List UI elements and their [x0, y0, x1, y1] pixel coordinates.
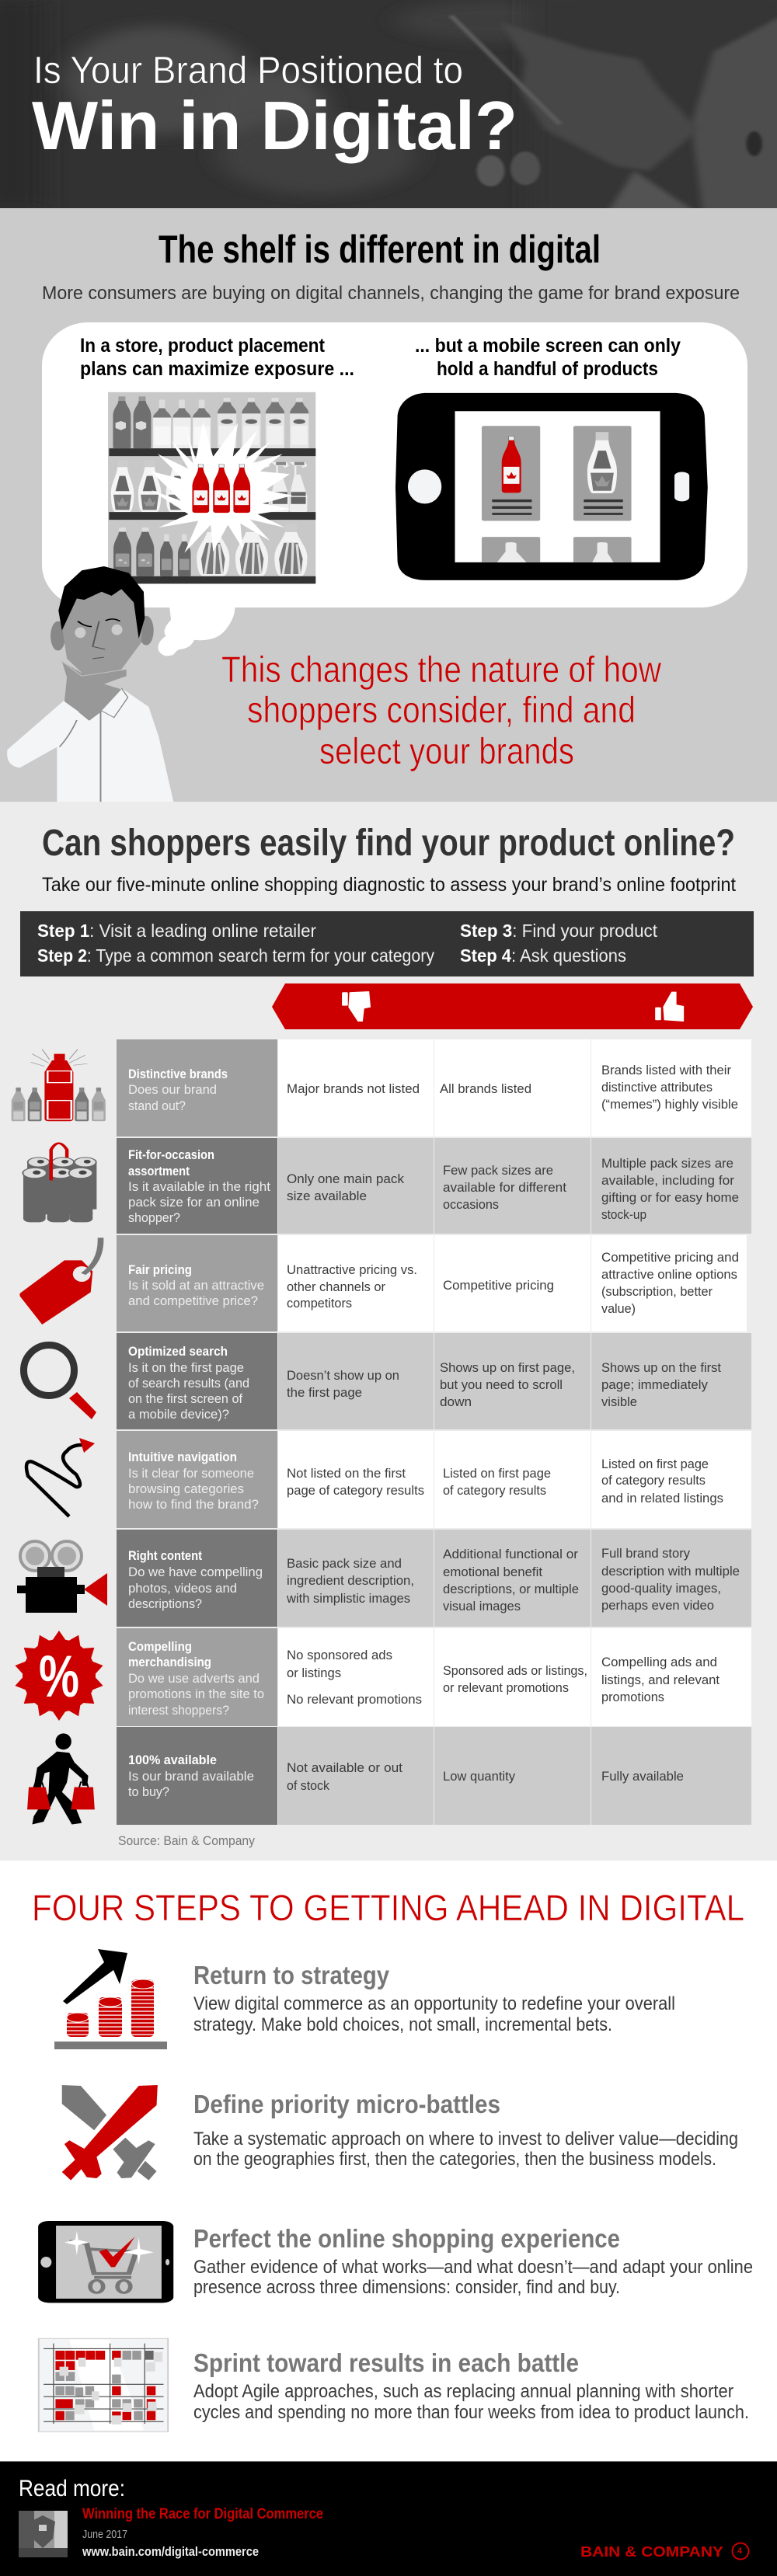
cells: Only one main pack	[287, 1171, 404, 1186]
row label: pack size for an online	[128, 1195, 260, 1210]
row label: Is it on the first page	[128, 1360, 244, 1375]
report date: June 2017	[82, 2528, 127, 2541]
cells: Not listed on the first	[287, 1466, 406, 1481]
icon: thumbs up	[655, 992, 684, 1022]
row label: Is it clear for someone	[128, 1466, 254, 1481]
row label: Is our brand available	[128, 1769, 254, 1784]
icon: multipack	[23, 1144, 96, 1222]
step body	[193, 1993, 675, 2035]
cells: Not available or out	[287, 1760, 402, 1775]
row label: a mobile device)?	[128, 1407, 229, 1422]
row label: Distinctive brands	[128, 1067, 228, 1081]
mobile caption: hold a handful of products	[437, 358, 658, 380]
icon: price tag	[20, 1238, 101, 1325]
cells: Listed on first page	[601, 1457, 709, 1471]
cells: Brands listed with their	[601, 1063, 731, 1077]
icon: chip stacks and arrow	[54, 1949, 167, 2049]
row label: stand out?	[128, 1098, 186, 1113]
step body: on the geographies first, then the categories, then the business models.	[193, 2149, 716, 2170]
store shelf illustration	[108, 392, 315, 583]
step body: View digital commerce as an opportunity to redefine your overall	[193, 1993, 675, 2014]
cells: Full brand story	[601, 1546, 690, 1561]
icon: squiggle arrow	[26, 1438, 95, 1516]
report cover thumbnail	[19, 2511, 68, 2557]
icon: thumbs down	[342, 991, 371, 1022]
cells: visible	[601, 1394, 637, 1409]
step heading: Perfect the online shopping experience	[193, 2224, 620, 2253]
step body: Adopt Agile approaches, such as replacing annual planning with shorter	[193, 2381, 733, 2402]
cells: size available	[287, 1189, 367, 1203]
hero header	[0, 0, 777, 218]
cells: All brands listed	[440, 1081, 531, 1096]
icon: film camera	[17, 1541, 107, 1613]
cells: promotions	[601, 1690, 664, 1704]
step body	[193, 2257, 753, 2298]
cells: Fully available	[601, 1769, 684, 1784]
store caption: plans can maximize exposure ...	[80, 358, 354, 380]
cells	[287, 1760, 684, 1793]
table row: fit-for-occasion assortment	[23, 1138, 751, 1234]
cells: good-quality images,	[601, 1581, 721, 1596]
cells: Multiple pack sizes are	[601, 1156, 733, 1171]
row label	[128, 1147, 270, 1225]
step heading: Return to strategy	[193, 1961, 390, 1989]
store caption	[80, 335, 354, 380]
row label	[128, 1639, 264, 1718]
cells: Unattractive pricing vs.	[287, 1262, 417, 1277]
thinking man illustration	[7, 566, 173, 802]
cells: occasions	[443, 1197, 499, 1212]
cells: of category results	[443, 1483, 546, 1498]
row label: Does our brand	[128, 1082, 217, 1097]
cells: stock-up	[601, 1207, 646, 1222]
cells: competitors	[287, 1296, 352, 1311]
row label	[128, 1067, 228, 1113]
cells	[287, 1156, 739, 1222]
cells: value)	[601, 1301, 636, 1316]
cells: emotional benefit	[443, 1565, 542, 1579]
step heading: Sprint toward results in each battle	[193, 2348, 579, 2377]
icon: magnifier	[23, 1345, 96, 1419]
cells: perhaps even video	[601, 1598, 714, 1613]
cells: Competitive pricing	[443, 1278, 554, 1293]
step body: presence across three dimensions: consider, find and buy.	[193, 2277, 620, 2298]
row label: Is it available in the right	[128, 1179, 270, 1194]
step heading: Define priority micro-battles	[193, 2090, 500, 2118]
step 1: Step 1: Visit a leading online retailer	[37, 921, 316, 941]
cells	[287, 1063, 738, 1112]
row label	[128, 1262, 264, 1308]
table row: optimized search	[23, 1333, 751, 1429]
table row: 100% available	[27, 1727, 751, 1825]
report title: Winning the Race for Digital Commerce	[82, 2506, 323, 2522]
thought bubble tail	[158, 607, 235, 656]
cells: page; immediately	[601, 1377, 708, 1392]
cells: other channels or	[287, 1279, 385, 1294]
cells: No sponsored ads	[287, 1648, 392, 1662]
cells: Additional functional or	[443, 1547, 578, 1561]
cells: No relevant promotions	[287, 1692, 422, 1707]
row label: Fair pricing	[128, 1262, 192, 1277]
row label: descriptions?	[128, 1596, 202, 1611]
mobile caption: ... but a mobile screen can only	[415, 335, 681, 357]
red statement: select your brands	[319, 730, 574, 771]
cells	[287, 1250, 739, 1316]
red statement	[221, 649, 662, 771]
step 3: Step 3: Find your product	[460, 921, 658, 941]
row label: Fit-for-occasion	[128, 1147, 214, 1162]
row label: assortment	[128, 1164, 190, 1178]
section subheading: More consumers are buying on digital channels, changing the game for brand exposure	[42, 283, 740, 304]
step body	[193, 2129, 738, 2170]
cells: Listed on first page	[443, 1466, 551, 1481]
cells: available, including for	[601, 1173, 734, 1188]
cells: Major brands not listed	[287, 1081, 420, 1096]
cells: visual images	[443, 1599, 521, 1613]
cells: gifting or for easy home	[601, 1190, 739, 1205]
cells: Compelling ads and	[601, 1655, 717, 1669]
cells: Few pack sizes are	[443, 1163, 553, 1178]
cells: distinctive attributes	[601, 1080, 713, 1095]
cells: descriptions, or multiple	[443, 1582, 579, 1596]
step 2: Step 2: Type a common search term for your category	[37, 945, 434, 966]
cells: (“memes”) highly visible	[601, 1097, 738, 1112]
row label: Is it sold at an attractive	[128, 1278, 264, 1293]
Bain logo: BAIN & COMPANY	[580, 2543, 724, 2560]
section: the shelf is different	[0, 208, 777, 802]
cells: Doesn’t show up on	[287, 1368, 399, 1383]
row label: merchandising	[128, 1655, 211, 1669]
row label: and competitive price?	[128, 1293, 258, 1308]
cells: listings, and relevant	[601, 1673, 720, 1687]
step 4: Step 4: Ask questions	[460, 945, 626, 966]
row label: of search results (and	[128, 1376, 249, 1391]
step body	[193, 2381, 749, 2423]
section heading: The shelf is different in digital	[159, 228, 601, 271]
icon: percent badge: %	[39, 1644, 79, 1710]
cells: or listings	[287, 1666, 341, 1680]
red statement: shoppers consider, find and	[247, 689, 636, 730]
cells: of stock	[287, 1778, 329, 1793]
icon: crossed swords	[62, 2085, 158, 2181]
cells: Shows up on the first	[601, 1360, 721, 1375]
row label: on the first screen of	[128, 1391, 242, 1406]
row label: promotions in the site to	[128, 1687, 264, 1701]
row label: 100% available	[128, 1753, 217, 1767]
step: return to strategy	[54, 1949, 675, 2049]
cells: Low quantity	[443, 1769, 515, 1784]
row label	[128, 1344, 249, 1422]
row label: to buy?	[128, 1784, 169, 1799]
table row: distinctive brands	[12, 1039, 751, 1137]
cells: Competitive pricing and	[601, 1250, 739, 1265]
footer	[0, 2461, 777, 2576]
store caption: In a store, product placement	[80, 335, 326, 357]
section: diagnostic	[0, 802, 777, 1861]
row label: Intuitive navigation	[128, 1450, 237, 1464]
cells: description with multiple	[601, 1564, 740, 1579]
icon: agile board	[39, 2338, 168, 2432]
row label: interest shoppers?	[128, 1703, 229, 1718]
cells: Basic pack size and	[287, 1556, 402, 1571]
cells: ingredient description,	[287, 1573, 414, 1588]
cells: available for different	[443, 1180, 566, 1195]
icon: tablet with cart	[38, 2221, 173, 2303]
diagnostic subheading: Take our five-minute online shopping diagnostic to assess your brand’s online footprint	[42, 874, 736, 896]
step: perfect the online shopping experience	[38, 2221, 753, 2303]
cells: or relevant promotions	[443, 1680, 569, 1695]
icon: percent badge	[13, 1631, 105, 1721]
row label	[128, 1548, 263, 1611]
row label: Right content	[128, 1548, 202, 1563]
source note: Source: Bain & Company	[118, 1833, 255, 1848]
cells: page of category results	[287, 1483, 424, 1498]
step: define priority micro-battles	[62, 2085, 738, 2181]
table row: intuitive navigation	[26, 1431, 751, 1528]
cells	[287, 1360, 721, 1409]
mobile phone illustration	[395, 393, 708, 580]
row label	[128, 1450, 259, 1512]
table row: right content	[17, 1530, 751, 1627]
cells: Sponsored ads or listings,	[443, 1663, 587, 1678]
step: sprint toward results	[39, 2338, 749, 2432]
steps panel	[20, 911, 754, 976]
table row: compelling merchandising	[13, 1628, 751, 1726]
report url: www.bain.com/digital-commerce	[82, 2544, 259, 2559]
mobile caption	[415, 335, 681, 380]
title line 1: Is Your Brand Positioned to	[33, 50, 463, 92]
rating banner with thumbs	[272, 983, 753, 1029]
cells	[287, 1457, 723, 1506]
row label: Optimized search	[128, 1344, 228, 1359]
row label: how to find the brand?	[128, 1497, 259, 1512]
row label: shopper?	[128, 1210, 180, 1225]
row label: browsing categories	[128, 1481, 244, 1496]
row label: Do we use adverts and	[128, 1671, 260, 1686]
cells: (subscription, better	[601, 1284, 713, 1299]
cells	[287, 1648, 720, 1707]
row label	[128, 1753, 254, 1799]
table row: fair pricing	[20, 1235, 747, 1332]
section: four steps	[0, 1861, 777, 2461]
cells: the first page	[287, 1385, 362, 1400]
cells: down	[440, 1394, 472, 1409]
cells: with simplistic images	[286, 1591, 410, 1606]
cells	[286, 1546, 740, 1613]
row label: photos, videos and	[128, 1581, 237, 1596]
Bain logo: 4	[737, 2546, 743, 2556]
row label: Do we have compelling	[128, 1565, 263, 1579]
icon: bottles	[12, 1050, 106, 1121]
red statement: This changes the nature of how	[221, 649, 662, 690]
cells: attractive online options	[601, 1267, 737, 1282]
cells: Shows up on first page,	[440, 1360, 575, 1375]
cells: of category results	[601, 1473, 706, 1488]
row label: Compelling	[128, 1639, 192, 1654]
cells: but you need to scroll	[440, 1377, 563, 1392]
read more heading: Read more:	[19, 2476, 125, 2501]
title line 2: Win in Digital?	[32, 87, 517, 164]
thought bubble	[42, 322, 747, 607]
cells: and in related listings	[601, 1491, 723, 1506]
icon: shopper with bags	[27, 1733, 95, 1825]
step body: strategy. Make bold choices, not small, incremental bets.	[193, 2014, 612, 2035]
